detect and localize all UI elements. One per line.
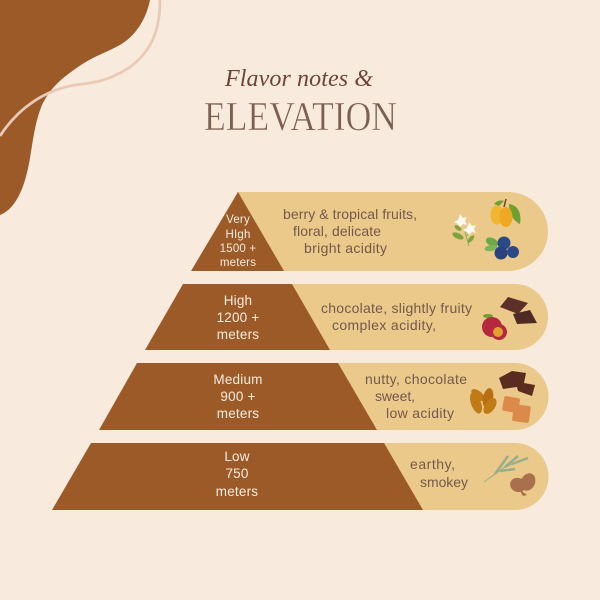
flavor description: bright acidity <box>304 240 387 256</box>
elevation label: 1200 + <box>217 310 259 325</box>
elevation label: Very <box>226 214 250 226</box>
flavor description: floral, delicate <box>293 223 381 239</box>
flavor description: complex acidity, <box>332 317 436 333</box>
pyramid segment <box>145 284 330 350</box>
icon: herb sprig <box>484 456 528 482</box>
elevation label <box>217 293 259 342</box>
tier: low <box>52 443 548 510</box>
elevation label: 900 + <box>220 389 256 404</box>
flavor description <box>321 300 472 333</box>
icon: chocolate <box>500 297 537 324</box>
band <box>335 363 548 430</box>
icon: plum <box>482 314 507 340</box>
elevation label: meters <box>217 327 259 342</box>
elevation label: meters <box>220 257 256 269</box>
title <box>204 66 397 139</box>
elevation label: HIgh <box>225 229 251 241</box>
flavor description <box>410 456 468 490</box>
elevation label: Medium <box>213 372 263 387</box>
icon: yellow fruits <box>490 199 520 227</box>
band <box>380 443 548 510</box>
flavor description <box>283 206 417 256</box>
tier: very high <box>191 192 548 271</box>
elevation label: 1500 + <box>220 243 256 255</box>
flavor description: chocolate, slightly fruity <box>321 300 472 316</box>
decorative curve <box>0 0 160 136</box>
icon: almonds <box>468 387 499 416</box>
icon: tobacco leaves <box>508 471 538 496</box>
elevation label <box>216 449 258 499</box>
title: elevation: ELEVATION <box>204 93 397 139</box>
elevation label: meters <box>216 484 258 499</box>
tier: medium <box>99 363 548 430</box>
decorative blob <box>0 0 150 215</box>
flavor description: smokey <box>420 474 468 490</box>
elevation label <box>220 214 256 269</box>
flavor description: nutty, chocolate <box>365 371 467 387</box>
pyramid segment <box>52 443 423 510</box>
elevation label <box>213 372 263 421</box>
pyramid segment <box>99 363 377 430</box>
flavor description: sweet, <box>375 388 415 404</box>
flavor description: low acidity <box>386 405 454 421</box>
band <box>237 192 548 271</box>
icon: chocolate pieces <box>499 371 535 396</box>
title: flavor notes: Flavor notes & <box>224 66 373 92</box>
icon: white flowers <box>451 214 476 246</box>
flavor description: berry & tropical fruits, <box>283 206 417 222</box>
flavor description: earthy, <box>410 456 455 472</box>
icon: caramels <box>502 396 531 423</box>
band <box>290 284 548 350</box>
elevation label: meters <box>217 406 259 421</box>
elevation label: High <box>224 293 252 308</box>
pyramid segment <box>191 192 284 271</box>
tier: high <box>145 284 548 350</box>
elevation label: 750 <box>225 466 249 481</box>
elevation label: Low <box>224 449 250 464</box>
flavor description <box>365 371 467 421</box>
icon: blueberries <box>484 236 519 260</box>
